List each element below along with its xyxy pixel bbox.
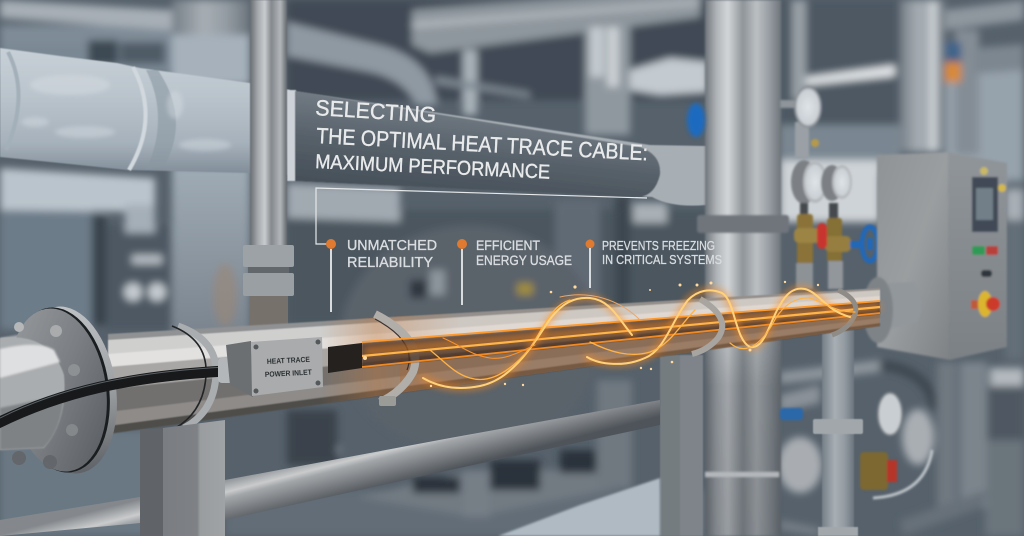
blue valve (780, 408, 803, 420)
red valve handle (817, 223, 827, 249)
upper hot wire (362, 301, 880, 342)
brass valve left (794, 203, 820, 289)
wave strands (423, 289, 855, 388)
insulated pipe, bottom (498, 478, 660, 536)
indicator lights (972, 246, 998, 277)
callout: efficient energy usage: EFFICIENT (476, 237, 540, 253)
lower hot wire (362, 313, 880, 367)
callout: efficient energy usage: ENERGY USAGE (476, 252, 572, 268)
upper gauge (780, 87, 821, 158)
curved tube (873, 450, 932, 498)
wave glow (423, 289, 850, 388)
lower right machinery (778, 190, 1024, 536)
callout: prevents freezing (586, 238, 722, 288)
cable gland (218, 358, 244, 383)
heat tint over pipe (320, 288, 880, 404)
pipe far-end flange (863, 277, 921, 343)
brass valve right (825, 203, 851, 289)
title line 2: THE OPTIMAL HEAT TRACE CABLE: (316, 123, 649, 165)
black power cable and junction box (0, 337, 362, 424)
dark conduit line along pipe (362, 301, 880, 368)
display screen (972, 177, 998, 232)
small gauge (878, 393, 902, 435)
large vertical steel column (697, 0, 789, 536)
left flange with bolts (0, 300, 127, 480)
black cable (0, 371, 226, 424)
front support post (140, 420, 225, 536)
left pipe clamp (172, 326, 216, 429)
callout connector frame (316, 188, 647, 244)
orange glow around cable (365, 307, 880, 352)
tank base frame (357, 380, 632, 517)
pipe body stripes (108, 288, 880, 434)
emergency stop button (971, 291, 1000, 317)
pressure gauge right (821, 165, 851, 201)
brass valve (860, 452, 888, 490)
callout: prevents freezing: IN CRITICAL SYSTEMS (602, 252, 722, 267)
callout: efficient energy usage (457, 237, 572, 305)
stainless control panel (877, 152, 1007, 360)
title line 3: MAXIMUM PERFORMANCE (315, 151, 551, 184)
middle hot wire (362, 307, 880, 356)
heat trace cable (362, 301, 880, 368)
right pipe clamp (375, 314, 415, 406)
box label: POWER INLET (265, 368, 312, 379)
frost speckle (21, 75, 231, 151)
mid pipe clamps (692, 290, 856, 354)
lower diagonal rail pipe (0, 400, 660, 536)
callout: unmatched reliability: UNMATCHED (347, 237, 437, 254)
glowing helical waves (363, 281, 855, 388)
blue valve handle (850, 227, 878, 261)
dark insulated pipe band behind title (287, 90, 706, 206)
right sleeve connector (328, 343, 362, 373)
title line 1: SELECTING (315, 95, 437, 128)
box label: HEAT TRACE (267, 355, 310, 366)
box label (265, 355, 312, 379)
insulated frosted pipe, upper left (0, 48, 290, 175)
blue valve in background (687, 103, 705, 137)
title (315, 95, 649, 184)
bottom-right valves and gauges (780, 393, 932, 498)
near pipe end (0, 328, 60, 450)
main heated steel pipe (0, 277, 921, 480)
vertical steel drop pipe and coupling (243, 0, 294, 330)
callout: unmatched reliability: RELIABILITY (347, 254, 433, 271)
sparks (363, 281, 819, 387)
callout: prevents freezing: PREVENTS FREEZING (602, 238, 715, 253)
warm underside of pipe (400, 314, 880, 393)
callout: unmatched reliability (326, 237, 437, 312)
pipe joint seams (129, 67, 146, 170)
pressure gauge left (791, 160, 826, 204)
junction box (226, 337, 323, 397)
red handle (887, 460, 897, 482)
gauges and brass valves (780, 87, 878, 289)
lower support posts and vertical pipe (660, 330, 863, 536)
